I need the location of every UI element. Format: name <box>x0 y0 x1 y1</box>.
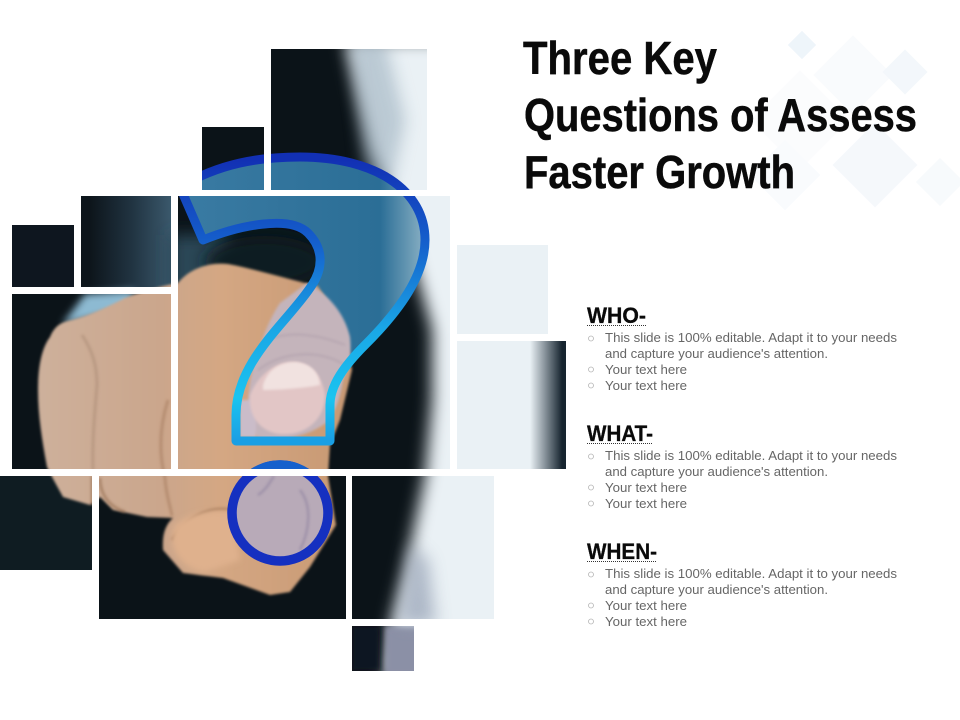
section: WHO: and capture your audience's attention. <box>605 347 828 361</box>
fist <box>38 264 352 595</box>
section: WHO: This slide is 100% editable. Adapt it to your needs <box>605 331 897 345</box>
hand <box>38 264 352 595</box>
background diamond pattern <box>750 31 960 210</box>
lavender finger tip <box>247 283 351 439</box>
section: WHEN: WHEN- <box>587 539 657 564</box>
section: WHEN: Your text here <box>605 599 687 613</box>
shaded streak in top tile <box>350 40 405 190</box>
dark blob under the hook <box>197 238 316 278</box>
finger knuckle lines <box>258 335 345 370</box>
section: WHEN <box>587 539 897 629</box>
left dark tile <box>12 225 74 287</box>
section: WHAT: Your text here <box>605 497 687 511</box>
section: WHO: WHO- <box>587 303 646 328</box>
slate gradient panel <box>96 196 171 287</box>
dark cover left of the lower small tile <box>352 626 380 671</box>
light blue glow above the fist <box>62 290 135 325</box>
section: WHAT <box>587 421 897 511</box>
finger crease two <box>161 400 172 516</box>
section: WHAT: Your text here <box>605 481 687 495</box>
muted lower garment tile <box>382 626 414 671</box>
section: WHO: Your text here <box>605 379 687 393</box>
section: WHAT: This slide is 100% editable. Adapt it to your needs <box>605 449 897 463</box>
lower knuckle shading <box>92 476 232 540</box>
title: Faster Growth <box>524 146 795 198</box>
slate area left of question mark <box>170 235 230 295</box>
question mark dot <box>232 465 328 561</box>
title <box>523 32 917 198</box>
nail <box>263 362 320 390</box>
title: Three Key <box>523 32 717 84</box>
section: WHEN: and capture your audience's attention. <box>605 583 828 597</box>
section: WHO: Your text here <box>605 363 687 377</box>
section: WHEN: Your text here <box>605 615 687 629</box>
section: WHO <box>587 303 897 393</box>
question mark outline <box>180 157 425 441</box>
white garment <box>345 40 590 680</box>
dark edge of garment tile <box>530 341 566 469</box>
grey fold in the lower garment tile <box>398 545 436 625</box>
lower dark teal backdrop <box>0 476 92 570</box>
thumb highlight <box>172 511 240 572</box>
section: WHAT: WHAT- <box>587 421 653 446</box>
strip inside question mark stem <box>240 400 256 437</box>
section: WHAT: and capture your audience's attention. <box>605 465 828 479</box>
question mark dot top arc <box>251 460 309 469</box>
finger nail tip <box>250 362 325 434</box>
photo mosaic: fist with question mark <box>0 40 600 680</box>
dark photo backdrop <box>12 49 446 671</box>
blue tinted question mark fill <box>188 162 420 356</box>
finger crease one <box>82 335 97 470</box>
section: WHEN: This slide is 100% editable. Adapt it to your needs <box>605 567 897 581</box>
